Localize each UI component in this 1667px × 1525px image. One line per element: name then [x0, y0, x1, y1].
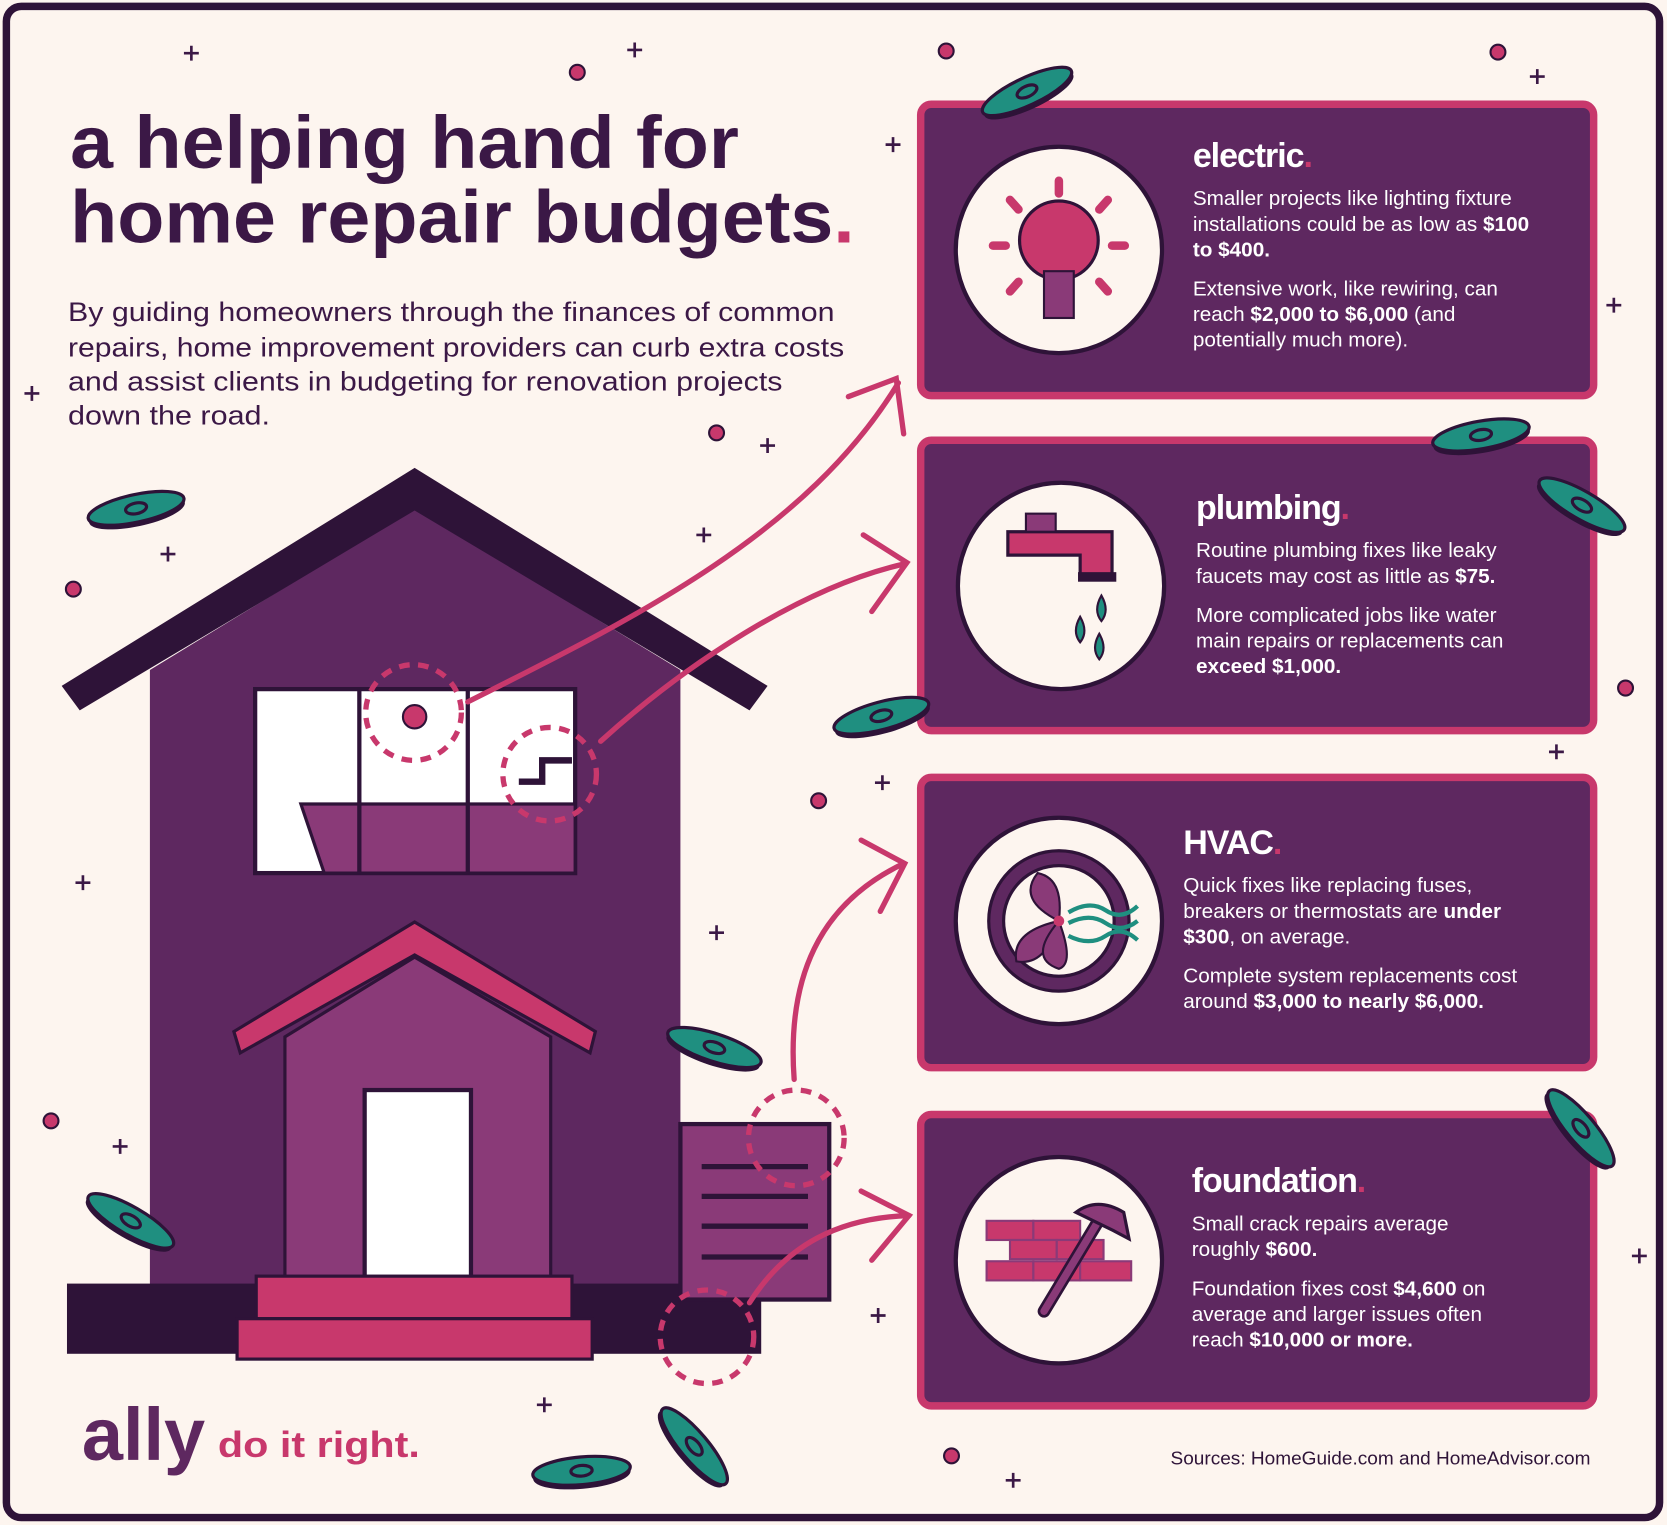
panel: foundation: roughly $600. — [1192, 1238, 1317, 1261]
panel: electric — [921, 104, 1594, 396]
panel: plumbing: More complicated jobs like water — [1196, 604, 1497, 627]
ac unit — [680, 1124, 829, 1300]
panel: electric: to $400. — [1193, 238, 1270, 261]
panel: foundation: Small crack repairs average — [1192, 1212, 1449, 1235]
logo: ally — [82, 1393, 205, 1476]
panel: electric: potentially much more). — [1193, 329, 1408, 352]
arrows — [468, 379, 909, 1303]
icon: bricks and hammer — [956, 1157, 1162, 1363]
panel: HVAC: Quick fixes like replacing fuses, — [1183, 874, 1472, 897]
panel: HVAC: $300, on average. — [1183, 925, 1350, 948]
icon: faucet — [958, 483, 1164, 689]
panel: electric: installations could be as low as $100 — [1193, 213, 1529, 236]
panel: HVAC: Complete system replacements cost — [1183, 965, 1517, 988]
panel: foundation — [921, 1115, 1594, 1406]
title line 2: home repair budgets . — [70, 175, 855, 258]
dashed highlight circles — [366, 665, 844, 1384]
intro paragraph: and assist clients in budgeting for renovation projects — [68, 366, 782, 396]
panel: plumbing: main repairs or replacements can — [1196, 630, 1503, 653]
panel: plumbing: faucets may cost as little as $75. — [1196, 565, 1495, 588]
panel: electric: electric. — [1193, 137, 1312, 175]
coins over panels — [831, 58, 1631, 1177]
panel: electric: reach $2,000 to $6,000 (and — [1193, 303, 1455, 326]
panel: plumbing: Routine plumbing fixes like leaky — [1196, 539, 1497, 562]
panel: plumbing — [921, 440, 1594, 731]
intro paragraph: By guiding homeowners through the finances of common — [68, 297, 835, 327]
coins — [79, 485, 765, 1495]
panel: HVAC — [921, 777, 1594, 1068]
icon: light bulb — [956, 147, 1162, 353]
logo — [82, 1393, 420, 1476]
intro paragraph: down the road. — [68, 400, 270, 430]
panel: foundation: foundation. — [1192, 1162, 1365, 1200]
title: a helping hand for — [70, 101, 739, 184]
panel: foundation: Foundation fixes cost $4,600 on — [1192, 1277, 1485, 1300]
panel: foundation: average and larger issues often — [1192, 1303, 1482, 1326]
intro paragraph: repairs, home improvement providers can curb extra costs — [68, 332, 844, 362]
panel: HVAC: HVAC. — [1183, 824, 1281, 862]
panel: plumbing: exceed $1,000. — [1196, 655, 1341, 678]
icon: fan — [956, 818, 1162, 1024]
panel: HVAC: around $3,000 to nearly $6,000. — [1183, 990, 1484, 1013]
porch — [285, 957, 551, 1287]
logo: do it right. — [218, 1424, 420, 1465]
panel: HVAC: breakers or thermostats are under — [1183, 900, 1501, 923]
panel: plumbing: plumbing. — [1196, 489, 1349, 527]
window — [255, 689, 575, 873]
panel: electric: Extensive work, like rewiring, can — [1193, 278, 1498, 301]
panel: electric: Smaller projects like lighting fixture — [1193, 187, 1512, 210]
panel: foundation: reach $10,000 or more. — [1192, 1328, 1413, 1351]
house — [62, 468, 829, 1359]
intro paragraph — [68, 297, 844, 430]
sources: Sources: HomeGuide.com and HomeAdvisor.com — [1171, 1448, 1590, 1468]
